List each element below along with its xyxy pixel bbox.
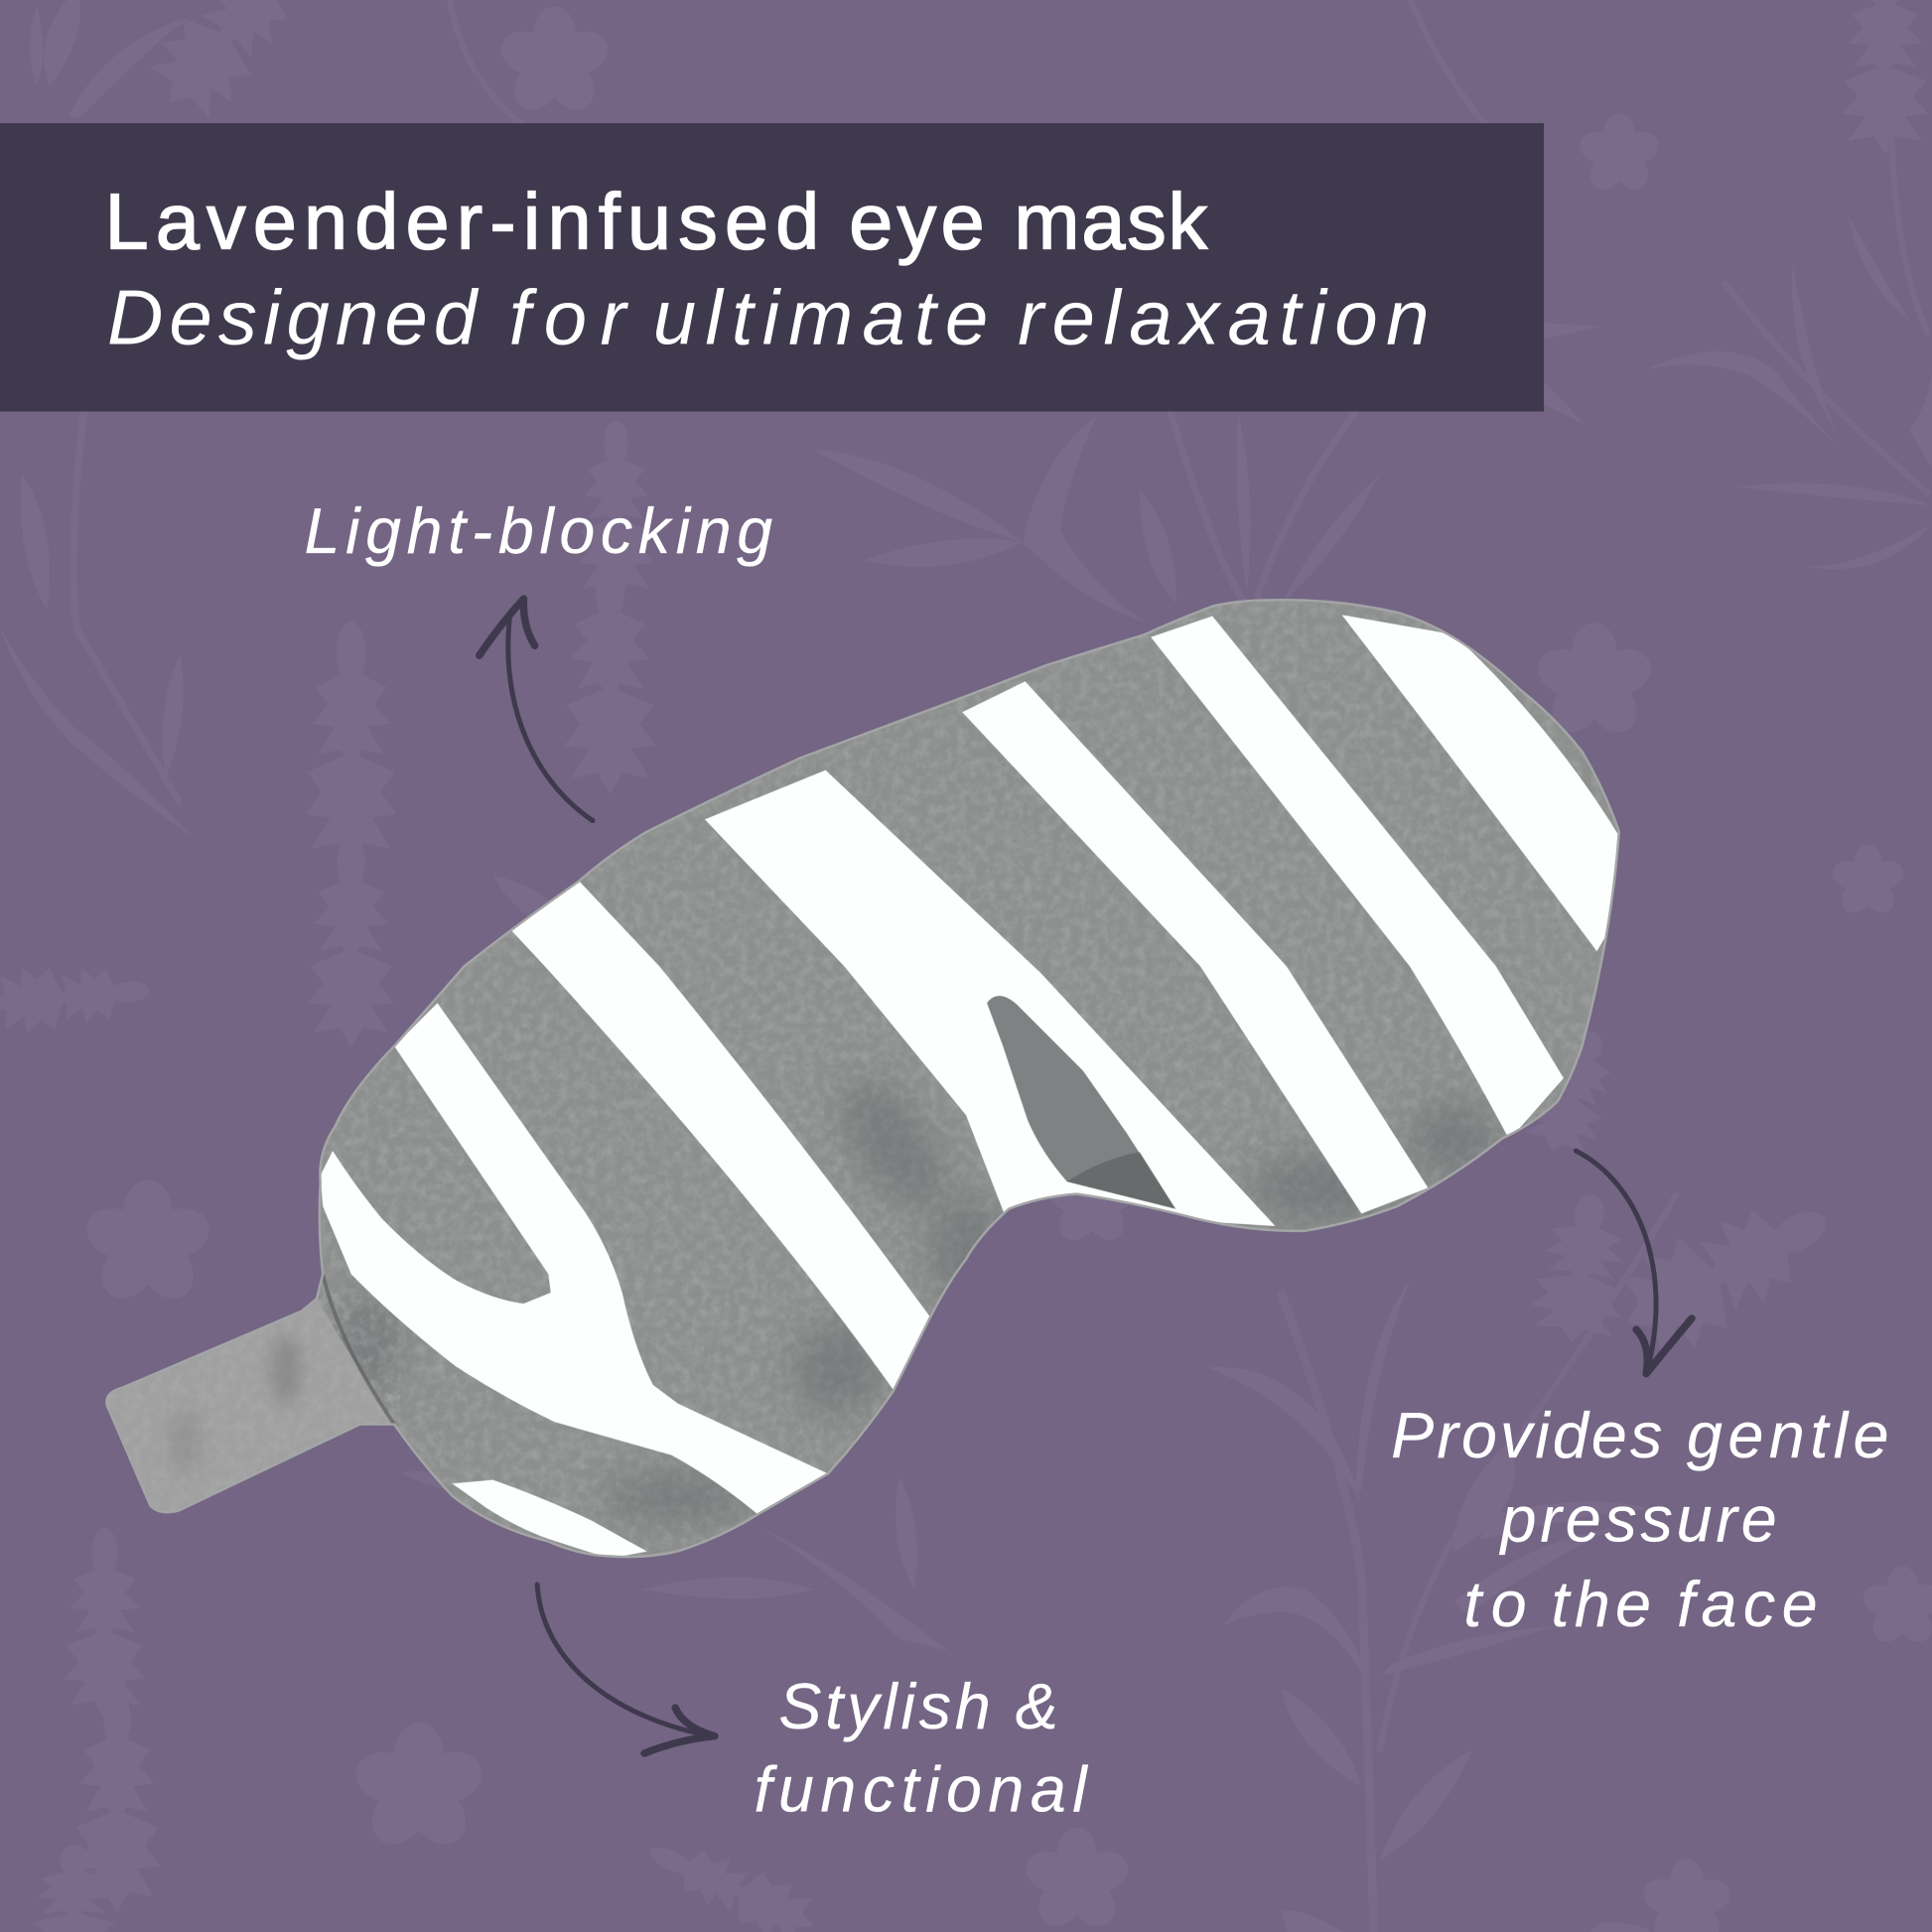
arrow: down to gentle pressure bbox=[1576, 1151, 1692, 1374]
label: provides gentle pressure to the face: pressure bbox=[1499, 1484, 1777, 1556]
nose notch bbox=[987, 996, 1175, 1208]
label: light-blocking: Light-blocking bbox=[305, 495, 772, 567]
subtitle text: ultimate bbox=[653, 273, 988, 360]
label: stylish and functional: Stylish bbox=[778, 1671, 991, 1742]
subtitle text: Designed bbox=[107, 273, 480, 360]
title text bbox=[104, 178, 1208, 266]
arrow: right to stylish and functional bbox=[537, 1585, 715, 1753]
label: provides gentle pressure to the face: face bbox=[1677, 1569, 1818, 1640]
label: provides gentle pressure to the face bbox=[1391, 1400, 1889, 1640]
mask edge bbox=[106, 600, 1619, 1557]
fabric shading bbox=[343, 1065, 1497, 1522]
subtitle text: for bbox=[509, 273, 628, 360]
label: provides gentle pressure to the face: gentle bbox=[1687, 1400, 1889, 1471]
eye mask photo illustration bbox=[73, 579, 1639, 1578]
label: stylish and functional: functional bbox=[755, 1753, 1088, 1825]
label: provides gentle pressure to the face: the bbox=[1552, 1569, 1651, 1640]
title text: mask bbox=[1014, 178, 1208, 266]
subtitle text: relaxation bbox=[1018, 273, 1430, 360]
title text: Lavender-infused bbox=[104, 178, 819, 266]
callout: light-blocking bbox=[305, 495, 772, 821]
label: provides gentle pressure to the face: to bbox=[1463, 1569, 1527, 1640]
label: stylish and functional bbox=[755, 1671, 1088, 1825]
subtitle text bbox=[107, 273, 1430, 360]
label: stylish and functional: & bbox=[1016, 1671, 1058, 1742]
title banner bbox=[0, 123, 1544, 412]
white stripes bbox=[321, 615, 1620, 1559]
mask body bbox=[73, 579, 1639, 1578]
arrow: up to light-blocking bbox=[480, 599, 593, 821]
title text: eye bbox=[849, 178, 985, 266]
label: provides gentle pressure to the face: Provides bbox=[1391, 1400, 1662, 1471]
strap bbox=[98, 1274, 400, 1516]
callout: stylish and functional bbox=[537, 1585, 1088, 1825]
callout: gentle pressure bbox=[1391, 1151, 1889, 1640]
